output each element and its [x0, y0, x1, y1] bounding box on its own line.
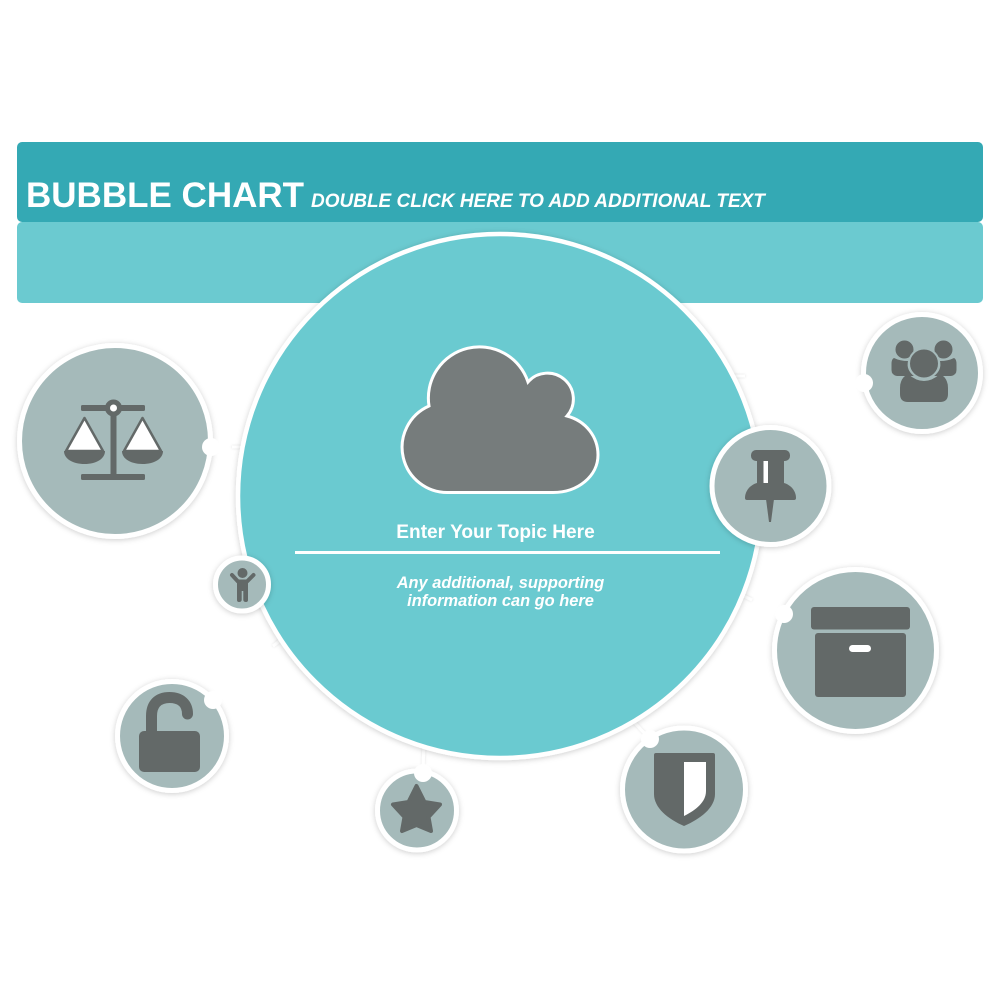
icon: balance scales	[64, 402, 163, 480]
connector stubs	[232, 376, 752, 768]
connector dots	[202, 374, 873, 782]
header band: title bar	[17, 142, 983, 222]
icon: open padlock	[139, 698, 200, 772]
bubble: open padlock	[118, 682, 226, 790]
main bubble	[238, 234, 762, 758]
bubble: push pin	[712, 428, 829, 544]
bubble: scales	[20, 346, 210, 536]
icon: shield	[654, 753, 715, 826]
icon: people group	[892, 340, 956, 402]
bubble: star	[378, 771, 456, 850]
icon: cloud	[402, 347, 598, 493]
header band: lower panel	[17, 222, 983, 303]
bubble: person	[216, 558, 268, 611]
icon: archive box	[811, 607, 910, 697]
divider line	[295, 551, 720, 554]
subtitle: DOUBLE CLICK HERE TO ADD ADDITIONAL TEXT	[311, 191, 766, 212]
title: BUBBLE CHART	[26, 176, 304, 215]
bubble: shield	[622, 728, 746, 851]
bubble: archive box	[774, 570, 936, 732]
icon: person with raised arms	[232, 568, 254, 602]
topic heading: Enter Your Topic Here	[396, 522, 595, 543]
bubble: people group	[864, 314, 980, 432]
icon: push pin	[745, 450, 796, 522]
supporting text: Any additional, supporting	[396, 574, 604, 592]
icon: star	[393, 786, 440, 831]
supporting text: information can go here	[407, 592, 594, 610]
